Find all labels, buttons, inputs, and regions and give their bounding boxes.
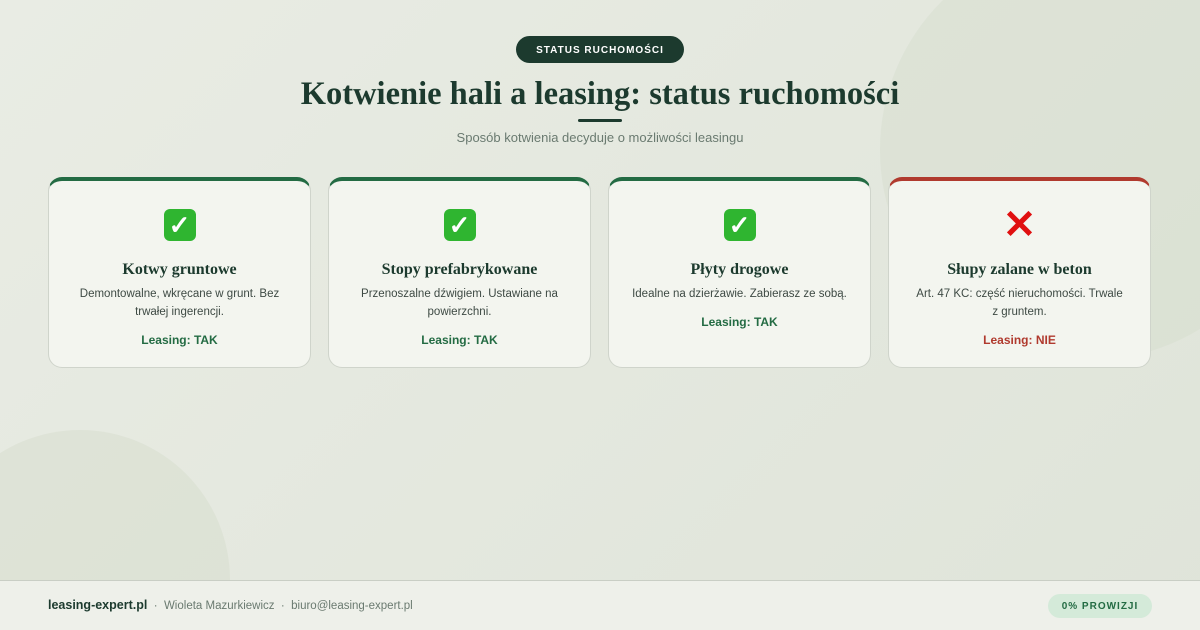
badge: STATUS RUCHOMOŚCI [536, 45, 664, 56]
status: Leasing: TAK [141, 333, 218, 347]
status: Leasing: TAK [701, 315, 778, 329]
pill [1048, 594, 1152, 618]
heading: Kotwy gruntowe [122, 261, 237, 278]
subtitle: Sposób kotwienia decyduje o możliwości leasingu [457, 130, 743, 145]
icon: check: ✓ [449, 210, 470, 240]
panel: płyty drogowe [608, 177, 871, 368]
text: Przenoszalne dźwigiem. Ustawiane na powierzchni. [361, 288, 558, 318]
icon: check: ✓ [169, 210, 190, 240]
status: Leasing: TAK [421, 333, 498, 347]
text: Art. 47 KC: część nieruchomości. Trwale z gruntem. [916, 288, 1123, 318]
panel: słupy w betonie [888, 177, 1151, 368]
heading: Płyty drogowe [691, 261, 788, 278]
text: Idealne na dzierżawie. Zabierasz ze sobą. [632, 288, 847, 300]
badge [516, 36, 684, 63]
pill: 0% PROWIZJI [1062, 600, 1138, 612]
heading: Stopy prefabrykowane [382, 261, 537, 278]
icon: check: ✓ [729, 210, 750, 240]
text: Demontowalne, wkręcane w grunt. Bez trwałej ingerencji. [80, 288, 279, 318]
panel: kotwy gruntowe [48, 177, 311, 368]
status: Leasing: NIE [983, 333, 1056, 347]
footer [0, 580, 1200, 630]
icon: cross: ✕ [1003, 203, 1036, 247]
title: Kotwienie hali a leasing: status ruchomości [301, 76, 899, 112]
footer contact: leasing-expert.pl · Wioleta Mazurkiewicz · biuro@leasing-expert.pl [48, 598, 413, 612]
panel: stopy prefabrykowane [328, 177, 591, 368]
heading: Słupy zalane w beton [947, 261, 1092, 278]
